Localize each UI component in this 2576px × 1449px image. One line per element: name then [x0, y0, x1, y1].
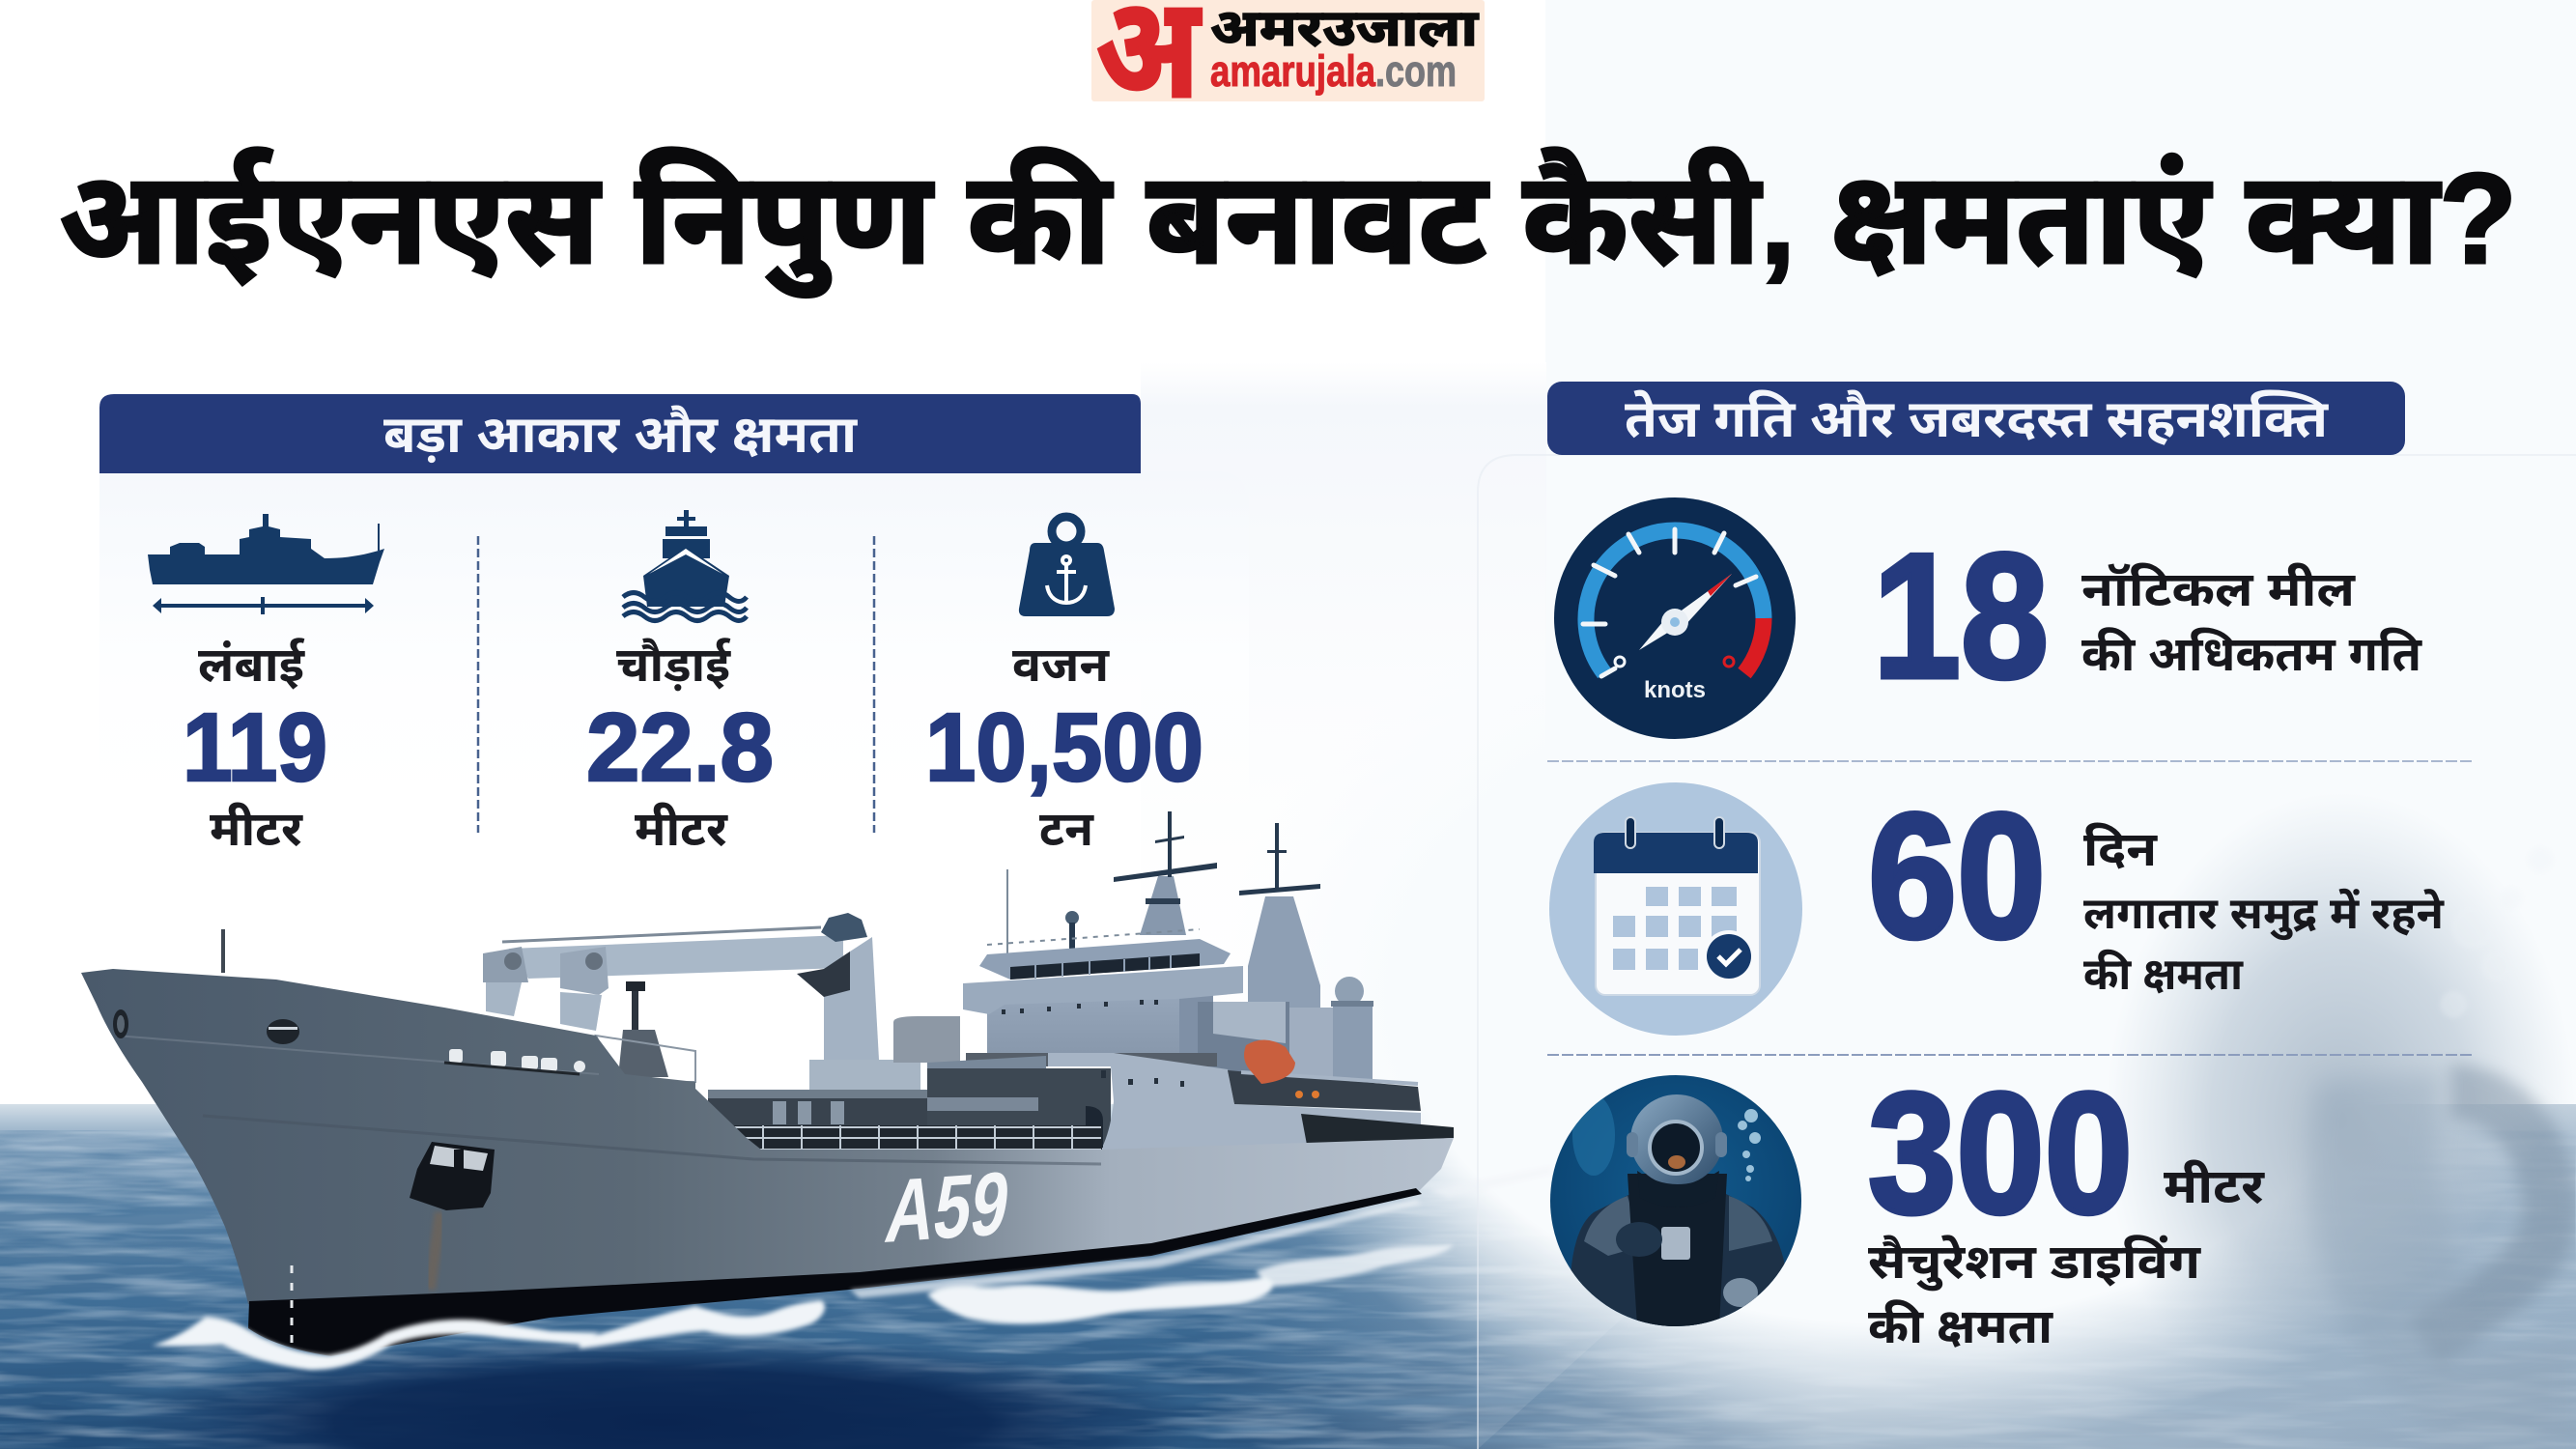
logo: अमरउजाला: [1210, 0, 1480, 57]
stat: endurance days: दिन: [2083, 822, 2158, 876]
stat: endurance days: की क्षमता: [2083, 949, 2244, 999]
superstructure: [727, 811, 1454, 1151]
icon: diver: [1549, 1075, 1802, 1326]
stat: top speed: [1873, 516, 2422, 715]
stat: endurance days: 60: [1868, 776, 2046, 975]
ocean background: [0, 1104, 2576, 1449]
icon: weight with anchor: [1019, 517, 1115, 616]
crane: [483, 913, 879, 1082]
right panel card: [1478, 455, 2576, 1449]
title: आईएनएस निपुण की बनावट कैसी, क्षमताएं क्या?: [59, 147, 2517, 298]
stat: beam: चौड़ाई: [616, 638, 731, 692]
hull details: [113, 1009, 585, 1352]
right panel heading bar: [1547, 382, 2405, 455]
stat: length: 119: [183, 694, 327, 802]
stat: saturation diving: की क्षमता: [1868, 1299, 2053, 1353]
divider: [873, 536, 875, 833]
divider: [1547, 760, 2473, 762]
ship illustration: [81, 811, 1551, 1370]
stat: endurance days: [1868, 776, 2445, 999]
logo: .com: [1375, 46, 1457, 96]
stat: beam: [586, 638, 774, 856]
stat: top speed: 18: [1873, 516, 2049, 715]
icon: ship front beam: [623, 510, 747, 620]
icon: ship length: [148, 514, 384, 614]
divider: [1547, 1054, 2473, 1056]
stat: top speed: नॉटिकल मील: [2081, 562, 2356, 616]
antenna mast: [221, 929, 225, 973]
stat: endurance days: लगातार समुद्र में रहने: [2083, 887, 2445, 940]
stat: weight: 10,500: [925, 694, 1203, 802]
stat: length: [183, 638, 327, 856]
stat: beam: 22.8: [586, 694, 774, 802]
bow wave foam: [152, 1166, 1551, 1370]
right panel heading bar: तेज गति और जबरदस्त सहनशक्ति: [1625, 389, 2330, 448]
logo: amarujala: [1210, 46, 1376, 96]
stat: beam: मीटर: [635, 802, 728, 856]
panel card: [99, 471, 1249, 850]
stat: saturation diving: [1868, 1057, 2265, 1353]
icon: calendar: [1549, 782, 1802, 1036]
panel: speed and endurance: [1478, 382, 2576, 1449]
boot topping: [248, 1188, 1422, 1356]
stat: saturation diving: 300: [1868, 1057, 2133, 1249]
ghosted diver background: [2130, 826, 2575, 1435]
stat: length: लंबाई: [198, 638, 305, 692]
stat: saturation diving: सैचुरेशन डाइविंग: [1868, 1235, 2201, 1293]
icon: speed gauge: [1554, 497, 1796, 739]
logo: [1091, 0, 1485, 127]
divider: [477, 536, 479, 833]
hull: [81, 969, 1454, 1304]
stat: weight: टन: [1039, 802, 1094, 856]
hull number: A59: [880, 1152, 1016, 1262]
after deck block: [708, 1016, 960, 1150]
stat: weight: [925, 638, 1203, 856]
stat: weight: वजन: [1012, 638, 1110, 692]
stat: top speed: की अधिकतम गति: [2081, 627, 2422, 681]
stat: length: मीटर: [210, 802, 303, 856]
stat: saturation diving: मीटर: [2164, 1159, 2265, 1213]
panel: size and capacity: [99, 394, 1249, 856]
right background wash: [1141, 0, 2576, 1106]
left panel heading bar: बड़ा आकार और क्षमता: [383, 405, 858, 464]
icon: speed gauge: knots: [1644, 677, 1706, 703]
left panel heading bar: [99, 394, 1141, 473]
hull shading: [116, 1036, 1101, 1164]
